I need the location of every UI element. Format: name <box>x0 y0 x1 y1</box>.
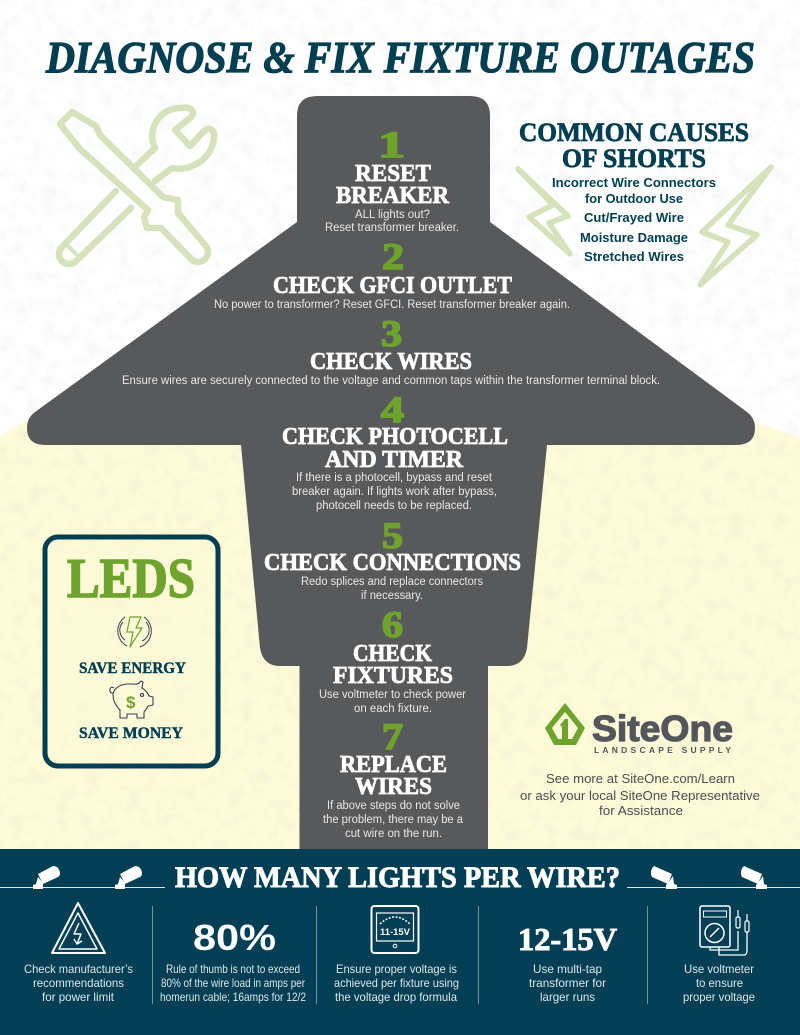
icon: crossed wrench and screwdriver <box>59 108 214 264</box>
step 4: AND TIMER <box>325 447 464 473</box>
box frame <box>45 537 218 766</box>
decorative wire with fixtures left <box>0 866 165 889</box>
text: see more at SiteOne: or ask your local SiteOne Representative <box>520 788 760 803</box>
step 3: CHECK WIRES <box>310 349 472 375</box>
logo wordmark: SiteOne <box>592 708 733 749</box>
step 1: RESET <box>355 161 431 187</box>
caption: achieved per fixture using <box>334 976 459 990</box>
column: multi-tap transformer <box>518 921 617 1004</box>
step 1: ALL lights out? <box>355 209 430 221</box>
step 1: 1 <box>378 125 405 166</box>
text: see more at SiteOne: for Assistance <box>599 803 683 818</box>
step 4: CHECK PHOTOCELL <box>282 424 508 450</box>
step 6: 6 <box>382 605 403 646</box>
step 2 <box>214 237 570 311</box>
step 7: the problem, there may be a <box>323 814 464 826</box>
icon: analog voltmeter: 11-15V <box>380 927 410 937</box>
caption: proper voltage <box>683 990 755 1004</box>
text: see more at SiteOne: See more at SiteOne.com/Learn <box>546 771 735 786</box>
step 5: Redo splices and replace connectors <box>301 576 483 588</box>
step 2: CHECK GFCI OUTLET <box>273 273 512 299</box>
caption: Use multi-tap <box>533 962 602 976</box>
step 4: breaker again. If lights work after bypass, <box>292 486 497 498</box>
caption: homerun cable; 16amps for 12/2 <box>160 990 306 1004</box>
heading: how many lights per wire: HOW MANY LIGHTS PER WIRE? <box>175 861 620 894</box>
step 5 <box>264 516 521 602</box>
list of causes: Incorrect Wire Connectors <box>552 175 716 190</box>
label: save money: SAVE MONEY <box>79 725 183 742</box>
list of causes: Stretched Wires <box>584 249 684 264</box>
icon: logo mark <box>545 703 585 745</box>
caption: Rule of thumb is not to exceed <box>166 962 300 976</box>
panel: how many lights per wire <box>0 849 800 1035</box>
icon: warning triangle <box>52 903 105 953</box>
label: save energy: SAVE ENERGY <box>79 660 186 677</box>
column: voltage drop <box>334 906 459 1004</box>
step 7: 7 <box>382 717 403 758</box>
step 4 <box>282 390 508 512</box>
icon: piggy bank <box>110 681 153 718</box>
step 7: If above steps do not solve <box>327 800 460 812</box>
step 6: on each fixture. <box>354 703 432 715</box>
logo: SiteOne Landscape Supply <box>545 703 733 755</box>
caption: larger runs <box>540 990 595 1004</box>
step 6: Use voltmeter to check power <box>319 689 466 701</box>
caption: Ensure proper voltage is <box>336 962 457 976</box>
step 4: photocell needs to be replaced. <box>316 500 472 512</box>
panel: LEDs <box>45 537 218 766</box>
caption: transformer for <box>529 976 606 990</box>
column: digital multimeter <box>683 906 755 1004</box>
caption: the voltage drop formula <box>335 990 457 1004</box>
dividers <box>152 906 648 1004</box>
heading: common causes <box>519 118 749 173</box>
icon: energy bolt <box>118 617 151 647</box>
step 5: if necessary. <box>361 590 423 602</box>
list of causes: Moisture Damage <box>580 230 688 245</box>
heading: common causes: OF SHORTS <box>562 144 706 173</box>
caption <box>683 962 755 1004</box>
panel: common causes of shorts <box>518 118 771 285</box>
caption: Check manufacturer’s <box>24 962 133 976</box>
column: 80 percent <box>160 917 306 1004</box>
caption: 80% of the wire load in amps per <box>161 976 305 990</box>
step 7: cut wire on the run. <box>345 828 442 840</box>
step 7 <box>323 717 464 840</box>
column: manufacturer limit <box>24 903 133 1004</box>
list of causes: for Outdoor Use <box>585 191 683 206</box>
step 4: If there is a photocell, bypass and reset <box>296 472 493 484</box>
step 7: REPLACE <box>340 752 447 778</box>
step 2: No power to transformer? Reset GFCI. Reset transformer breaker again. <box>214 299 570 311</box>
step 1 <box>325 125 459 234</box>
step 3: 3 <box>381 314 402 355</box>
heading: LEDS: LEDS <box>67 548 195 610</box>
stat: 80%: 80% <box>193 917 276 958</box>
icon: left lightning bolt <box>518 169 570 254</box>
step 1: BREAKER <box>336 183 450 209</box>
step 3: Ensure wires are securely connected to the voltage and common taps within the transformer terminal block. <box>122 375 660 387</box>
step 2: 2 <box>382 237 404 278</box>
step 4: 4 <box>381 390 404 431</box>
logo tagline: LANDSCAPE SUPPLY <box>594 745 731 755</box>
text: see more at SiteOne <box>520 771 760 818</box>
band background <box>0 849 800 1035</box>
arrow shape <box>27 96 755 849</box>
icon: piggy bank: $ <box>126 693 136 712</box>
stat: 12-15V: 12-15V <box>518 921 617 957</box>
decorative wire with fixtures right <box>627 866 800 889</box>
caption <box>160 962 306 1004</box>
caption: Use voltmeter <box>684 962 754 976</box>
step 6 <box>319 605 466 715</box>
arrow panel: troubleshooting steps <box>27 96 755 849</box>
step 3 <box>122 314 660 387</box>
caption <box>24 962 133 1004</box>
caption: recommendations <box>33 976 124 990</box>
caption: to ensure <box>696 976 743 990</box>
icon: right lightning bolt <box>700 167 771 285</box>
background: pale yellow hill <box>0 330 800 850</box>
step 5: 5 <box>382 516 403 557</box>
caption <box>529 962 606 1004</box>
icon: multimeter <box>700 906 749 955</box>
step 7: WIRES <box>355 774 432 800</box>
step 1: Reset transformer breaker. <box>325 222 459 234</box>
caption <box>334 962 459 1004</box>
list of causes: Cut/Frayed Wire <box>584 210 684 225</box>
list of causes <box>552 175 716 264</box>
heading: common causes: COMMON CAUSES <box>519 118 749 147</box>
step 5: CHECK CONNECTIONS <box>264 550 521 576</box>
step 6: CHECK <box>353 641 432 667</box>
caption: for power limit <box>42 990 115 1004</box>
step 6: FIXTURES <box>333 663 453 689</box>
